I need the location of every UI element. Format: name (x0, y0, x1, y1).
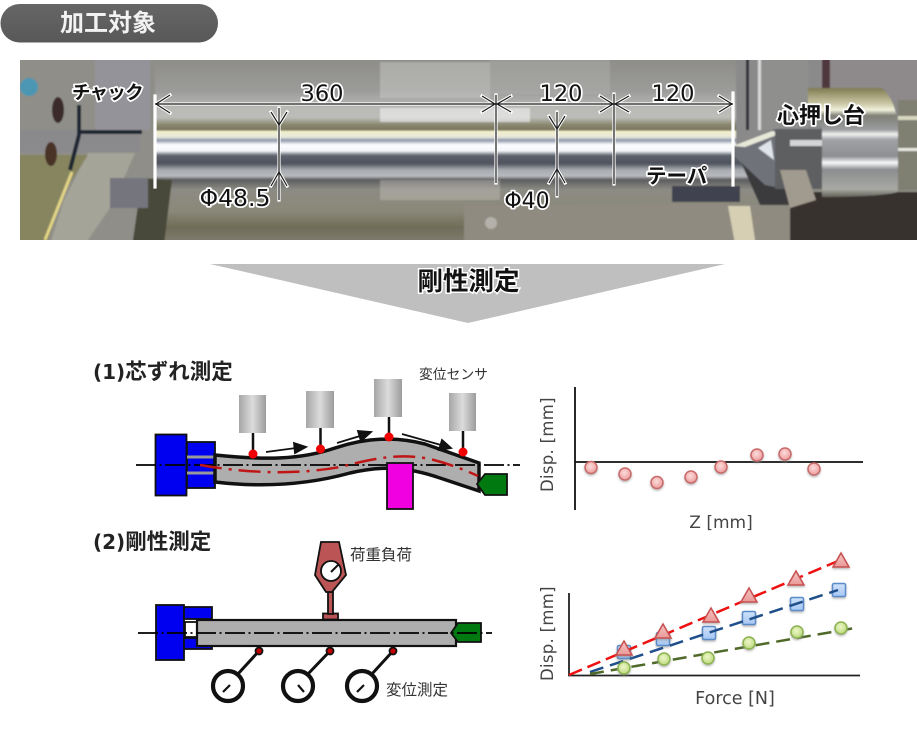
tailstock label: 心押し台 (777, 103, 865, 128)
photo panel: workpiece on lathe (20, 60, 917, 240)
taper label: テーパ (646, 165, 708, 188)
center axis line (136, 464, 520, 466)
steady rest (387, 463, 413, 509)
straight shaft (197, 620, 456, 646)
diagram: stiffness measurement (138, 542, 492, 701)
dimension 120 left: 120 (540, 81, 582, 107)
dimension diameter 40: Φ40 (504, 189, 550, 214)
heading: (2) stiffness measurement: (2)剛性測定 (93, 530, 211, 554)
green trend line (590, 628, 855, 674)
center axis line (138, 632, 492, 634)
dark base (789, 191, 917, 240)
chart: runout displacement vs Z (538, 387, 863, 533)
red triangles (616, 553, 849, 655)
title pill: 加工対象 (0, 4, 218, 42)
dimension 360: 360 (301, 81, 343, 107)
load label: 荷重負荷 (350, 546, 412, 564)
y axis label: Disp. [mm] (538, 586, 557, 681)
data points (585, 448, 820, 488)
lower rail (464, 212, 791, 240)
tailstock center (451, 623, 481, 642)
load gauge (315, 542, 346, 620)
motion arrows (266, 431, 451, 453)
green circles (618, 622, 847, 674)
blue trend line (590, 590, 838, 672)
sensors (239, 379, 476, 458)
displacement label: 変位測定 (386, 681, 448, 699)
title pill: 加工対象: 加工対象 (60, 10, 156, 37)
y axis label: Disp. [mm] (538, 397, 557, 492)
down arrow: 剛性測定: 剛性測定 (417, 268, 520, 296)
dial gauges (213, 648, 396, 701)
diagram: runout measurement (136, 367, 520, 509)
red runout curve (200, 456, 478, 476)
bent shaft (215, 439, 479, 491)
upper right machine (735, 70, 899, 146)
x axis label: Z [mm] (689, 513, 753, 533)
blue squares (618, 584, 846, 658)
shaft right end and taper (734, 129, 776, 188)
down arrow: 剛性測定 (210, 264, 725, 323)
chuck label: チャック (72, 82, 143, 103)
red trend line (569, 558, 845, 675)
x axis label: Force [N] (695, 689, 775, 709)
dimension lines (155, 93, 733, 200)
chart: displacement vs force (538, 553, 860, 709)
chuck (156, 434, 215, 496)
dimension 120 right: 120 (652, 81, 694, 107)
heading: (1) runout measurement: (1)芯ずれ測定 (93, 360, 233, 384)
tailstock (808, 88, 898, 197)
tailstock center (477, 474, 507, 495)
sensor label: 変位センサ (419, 367, 488, 382)
chuck side (20, 75, 155, 240)
chuck (156, 605, 212, 660)
dimension diameter 48.5: Φ48.5 (200, 184, 270, 212)
